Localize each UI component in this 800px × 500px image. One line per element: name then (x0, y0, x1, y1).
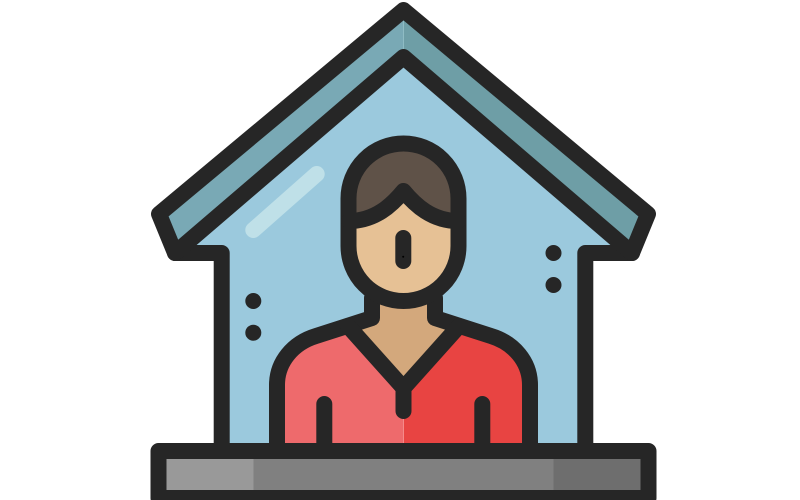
counter base (158, 451, 649, 500)
roof (159, 10, 648, 253)
house wall (175, 56, 632, 451)
wall dots right (546, 245, 562, 293)
neck (348, 290, 459, 388)
hair (348, 144, 458, 221)
head (348, 144, 458, 301)
wall dots left (245, 293, 261, 341)
person (277, 144, 530, 451)
wall highlight (253, 174, 317, 230)
shirt (277, 298, 530, 451)
mouth (395, 238, 411, 261)
